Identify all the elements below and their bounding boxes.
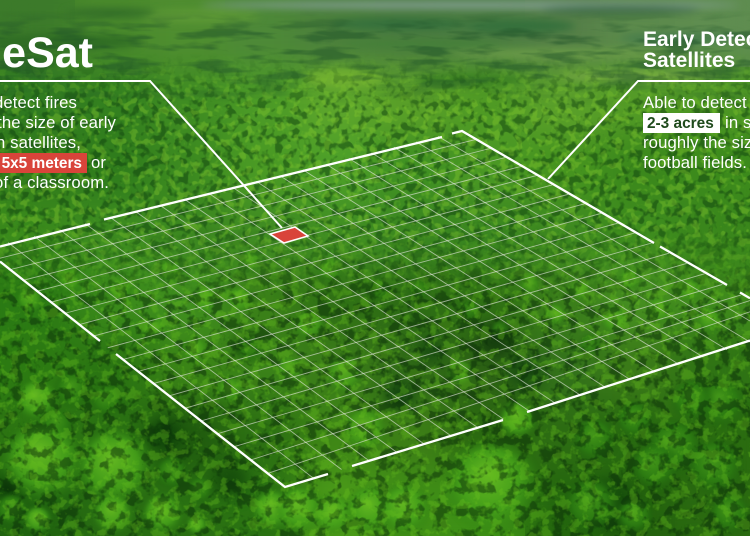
body text: FireSat: or <box>91 153 106 172</box>
tree texture <box>0 237 750 536</box>
mid-ground tree crowns <box>16 249 723 454</box>
left callout: FireSat <box>0 29 117 192</box>
right callout leader line <box>548 81 750 179</box>
left callout leader line <box>0 81 282 228</box>
body text: Early Detection Satellites <box>643 93 750 172</box>
body text: FireSat <box>0 93 117 192</box>
body text: Early Detection Satellites: football fields. <box>643 153 747 172</box>
heading: Early Detection Satellites: Satellites <box>643 49 735 72</box>
body text: Early Detection Satellites: 2-3 acres <box>647 115 714 132</box>
grid border: broken outline of the detection area <box>0 131 750 487</box>
grid overlay <box>0 136 750 478</box>
red FireSat pixel <box>270 227 308 243</box>
foreground tree crowns <box>0 370 750 536</box>
heading: FireSat: eSat <box>2 29 93 77</box>
right callout: Early Detection Satellites <box>643 28 750 172</box>
body text: FireSat: 5x5 meters <box>2 155 82 172</box>
shadow pockets <box>0 322 636 531</box>
body text: FireSat: the size of early <box>0 113 117 132</box>
hill ridges <box>0 1 740 88</box>
heading: Early Detection Satellites <box>643 28 750 72</box>
